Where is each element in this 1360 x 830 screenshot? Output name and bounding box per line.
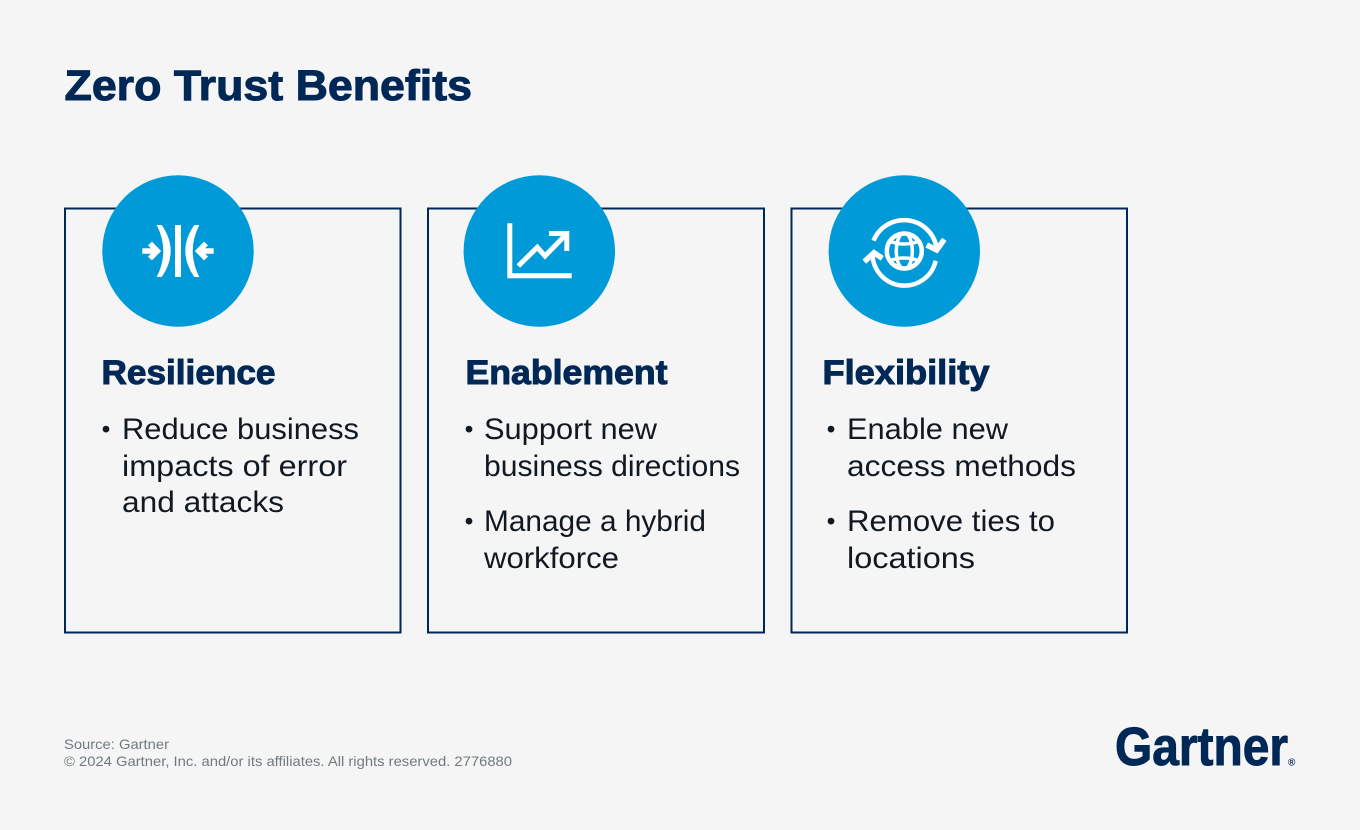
source note: © 2024 Gartner, Inc. and/or its affiliates. All rights reserved. 2776880 xyxy=(64,753,512,769)
bullet list: resilience: • xyxy=(102,416,110,444)
panel: flexibility xyxy=(792,175,1127,633)
bullet list: flexibility: Remove ties to xyxy=(847,505,1055,538)
bullet list: enablement: Support new xyxy=(484,413,657,446)
panel border: enablement xyxy=(428,208,764,632)
source note xyxy=(64,736,512,769)
bullet list: enablement: Manage a hybrid xyxy=(484,505,706,538)
bullet list: enablement: business directions xyxy=(484,450,740,483)
heading: flexibility: Flexibility xyxy=(822,354,990,392)
logo: Gartner: Gartner xyxy=(1115,717,1288,777)
bullet list: flexibility: locations xyxy=(847,542,975,575)
icon: enablement xyxy=(464,175,615,327)
bullet list: flexibility: • xyxy=(827,508,835,536)
icon: resilience xyxy=(102,175,254,327)
bullet list: flexibility: • xyxy=(827,416,835,444)
bullet list: flexibility: Enable new xyxy=(847,413,1008,446)
heading: resilience: Resilience xyxy=(102,354,276,392)
panel: resilience xyxy=(65,175,400,633)
bullet list: flexibility: access methods xyxy=(847,450,1076,483)
panel border: flexibility xyxy=(792,208,1127,632)
logo: Gartner: ® xyxy=(1288,757,1296,768)
bullet list: enablement: • xyxy=(465,416,473,444)
bullet list: resilience xyxy=(102,413,359,519)
panel: enablement xyxy=(428,175,764,633)
bullet list: resilience: Reduce business xyxy=(122,413,359,446)
bullet list: enablement xyxy=(465,413,740,575)
bullet list: enablement: • xyxy=(465,508,473,536)
title: Zero Trust Benefits xyxy=(64,62,472,110)
bullet list: resilience: impacts of error xyxy=(122,450,347,483)
panel border: resilience xyxy=(65,208,400,632)
icon: flexibility xyxy=(829,175,980,327)
bullet list: enablement: workforce xyxy=(483,542,619,575)
source note: Source: Gartner xyxy=(64,736,169,752)
heading: enablement: Enablement xyxy=(466,354,668,392)
bullet list: flexibility xyxy=(827,413,1076,575)
bullet list: resilience: and attacks xyxy=(122,486,284,519)
